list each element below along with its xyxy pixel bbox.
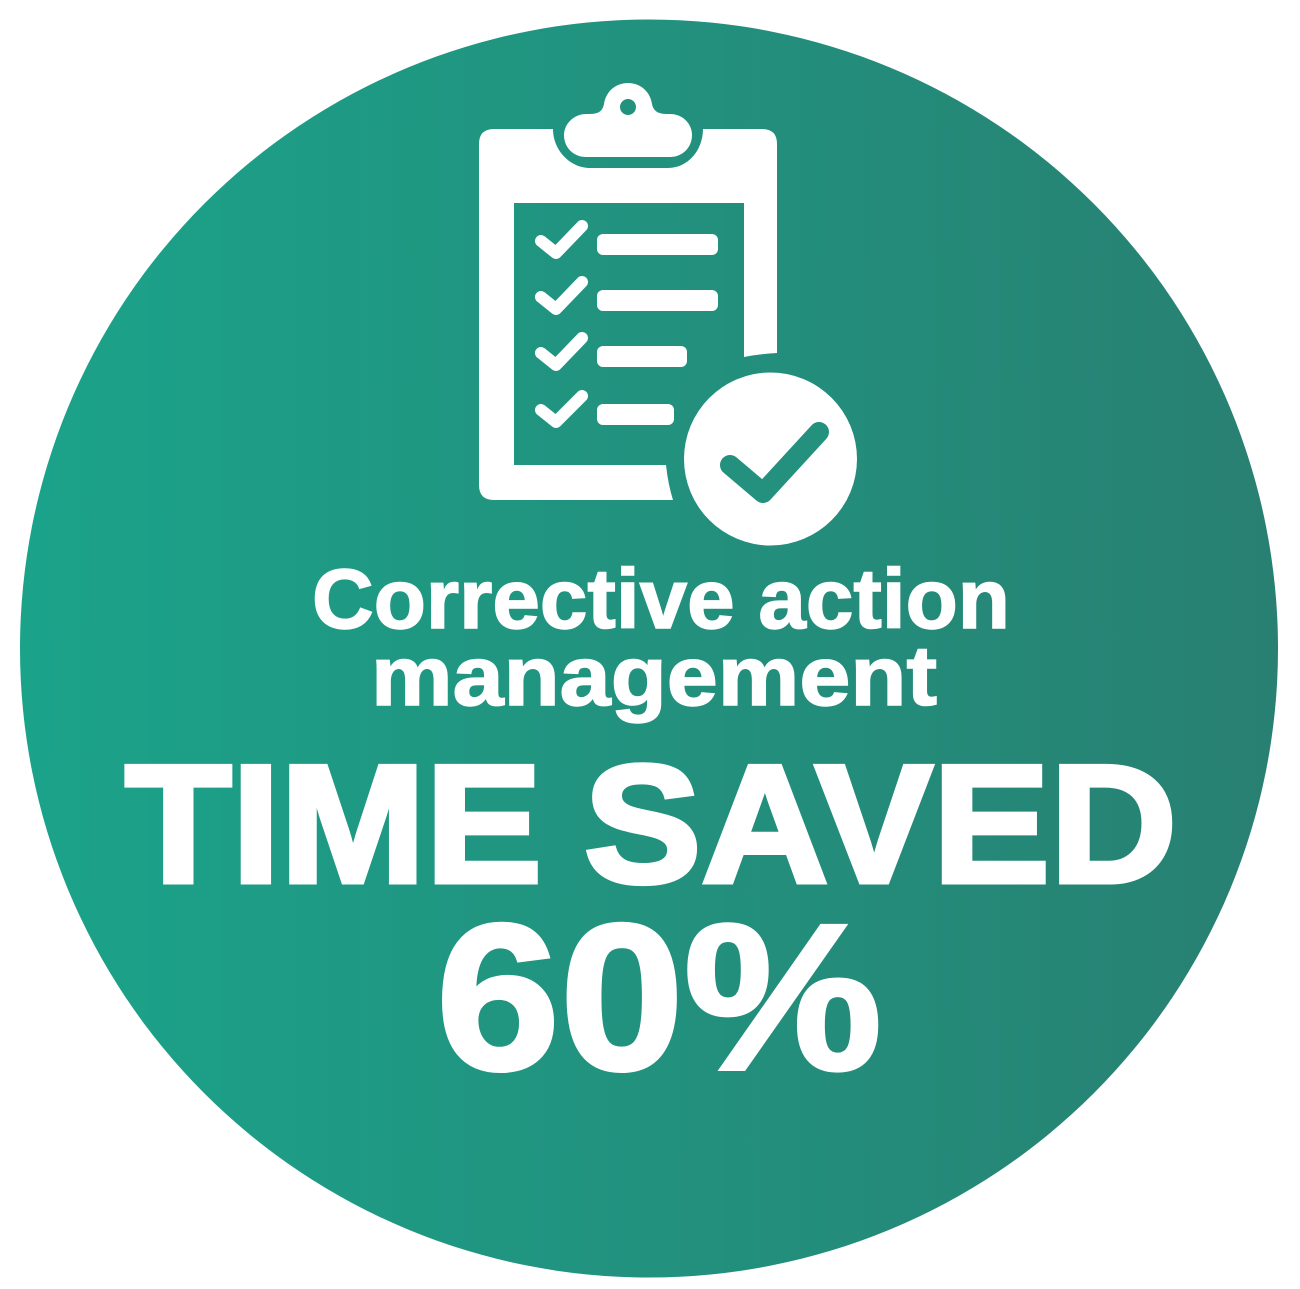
headline: time saved: SAVED <box>584 730 1177 918</box>
checklist row 4 <box>541 396 674 425</box>
headline: time saved <box>125 730 1177 918</box>
checklist row 1 <box>541 226 718 255</box>
heading: corrective action management: Corrective action <box>312 552 1010 646</box>
heading: corrective action management: management <box>371 629 937 723</box>
icon: check badge <box>684 372 857 546</box>
statistic: 60%: 60% <box>436 882 882 1114</box>
clipboard body <box>479 129 777 500</box>
checklist row 3 <box>541 338 687 367</box>
headline: time saved: TIME <box>125 730 542 918</box>
icon: clipboard with checklist <box>479 83 857 546</box>
checklist row 2 <box>541 282 718 311</box>
heading: corrective action management <box>312 552 1010 723</box>
clipboard clip <box>564 83 692 157</box>
